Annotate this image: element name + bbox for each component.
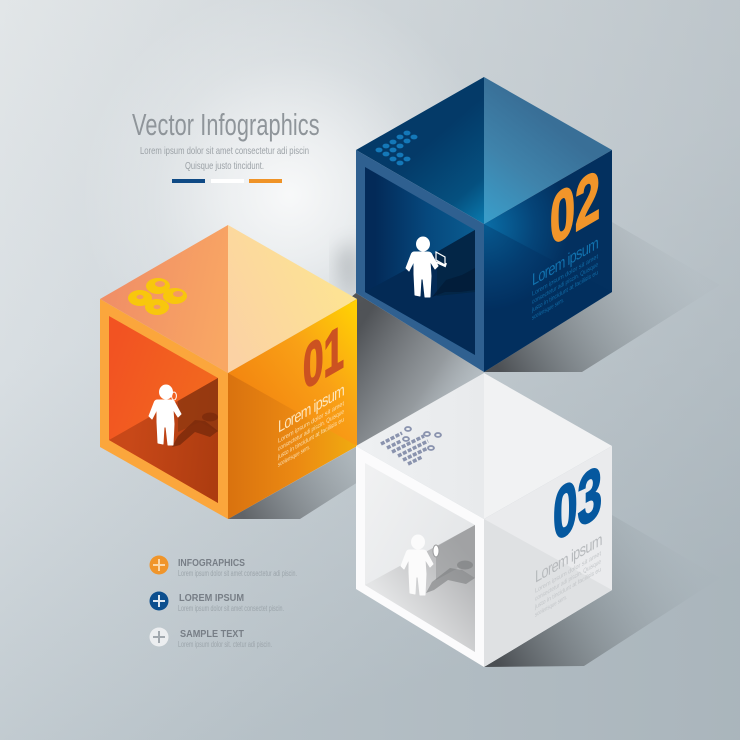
text: Lorem ipsum [534, 530, 602, 619]
text: Lorem ipsum: consectetur adi piscin. Quisque [535, 558, 601, 603]
opening [109, 316, 218, 503]
title block [132, 107, 320, 183]
legend item: sample text: SAMPLE TEXT [180, 629, 244, 640]
text: Lorem ipsum: consectetur adi piscin. Quisque [278, 408, 344, 453]
text: Lorem ipsum: consectetur adi piscin. Quisque [532, 261, 598, 306]
opening [365, 463, 475, 652]
person with tablet [401, 535, 439, 595]
text: Lorem ipsum: Lorem ipsum [532, 234, 599, 290]
panel: cube 02 blue [356, 77, 612, 372]
colour bars [172, 179, 282, 183]
text: Lorem ipsum: scelerisque sem. [535, 594, 567, 619]
top face [100, 225, 357, 373]
front frame [100, 299, 228, 519]
legend item: infographics: INFOGRAPHICS [178, 558, 245, 569]
legend item: sample text: Lorem ipsum dolor sit. ctetur adi piscin. [178, 640, 272, 649]
icon: dot grid [381, 427, 441, 464]
text: Lorem ipsum: Lorem ipsum [278, 381, 345, 437]
text: Lorem ipsum: justo in tincidunt at facilisis eu [277, 416, 344, 461]
panel: cube 01 orange [100, 225, 357, 519]
text: Lorem ipsum: Lorem ipsum dolor sit amet [535, 550, 601, 595]
number 03: 03 [553, 450, 602, 558]
front frame [356, 150, 484, 372]
legend item: lorem ipsum: Lorem ipsum dolor sit amet consectet piscin. [178, 604, 284, 613]
legend [150, 556, 297, 649]
person with laptop [406, 237, 446, 297]
icon: honeycomb [376, 131, 418, 165]
person with phone [149, 385, 181, 445]
text: Lorem ipsum: justo in tincidunt at facilisis eu [534, 566, 601, 611]
top face [356, 373, 612, 519]
number 01: 01 [303, 311, 344, 403]
subtitle: Lorem ipsum dolor sit amet consectetur adi piscin [140, 145, 309, 157]
text: Lorem ipsum: Lorem ipsum [535, 530, 602, 587]
legend item: lorem ipsum [150, 592, 284, 613]
text: Lorem ipsum: scelerisque sem. [532, 297, 564, 322]
legend item: infographics [150, 556, 297, 578]
legend item: infographics: Lorem ipsum dolor sit amet consectetur adi piscin. [178, 569, 297, 578]
cast shadows [228, 222, 720, 667]
text: Lorem ipsum: scelerisque sem. [278, 444, 310, 469]
subtitle [140, 145, 309, 172]
legend item: lorem ipsum: LOREM IPSUM [179, 593, 244, 604]
heading: Vector Infographics [132, 107, 320, 142]
text: Lorem ipsum: justo in tincidunt at facilisis eu [531, 269, 598, 314]
subtitle: Quisque justo tincidunt. [185, 160, 264, 172]
icon: four rings [128, 278, 187, 315]
top face [356, 77, 612, 224]
text: Lorem ipsum [531, 234, 599, 322]
opening [365, 167, 475, 355]
text: Lorem ipsum: Lorem ipsum dolor sit amet [278, 400, 344, 445]
panel: cube 03 white [356, 373, 612, 667]
front frame [356, 446, 484, 667]
text: Lorem ipsum: Lorem ipsum dolor sit amet [532, 253, 598, 298]
right face [484, 150, 612, 372]
right face [228, 299, 357, 519]
text: Lorem ipsum [277, 381, 345, 469]
right face [484, 446, 612, 667]
legend item: sample text [150, 628, 272, 649]
number 02: 02 [550, 155, 600, 262]
